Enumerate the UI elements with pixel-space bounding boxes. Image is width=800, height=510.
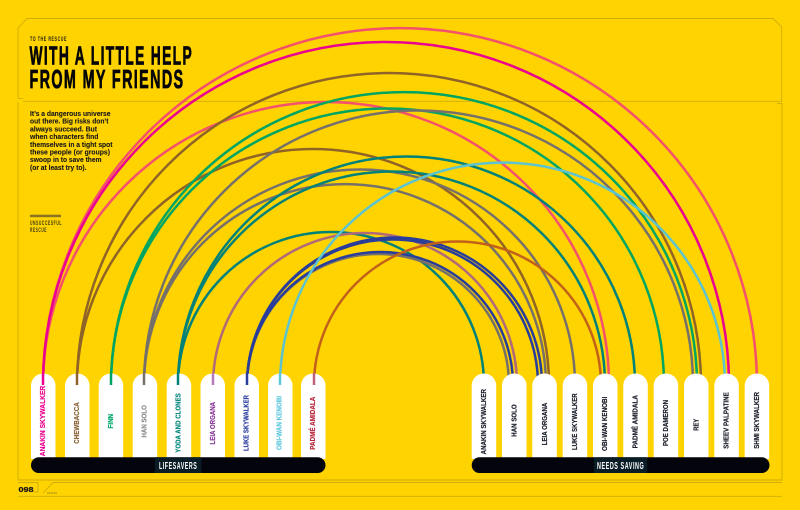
pill: Obi-Wan Kenobi: OBI-WAN KENOBI — [602, 397, 609, 451]
pill: Anakin Skywalker — [31, 373, 56, 459]
pill: Padme Amidala: PADMÉ AMIDALA — [630, 395, 640, 448]
legend: unsuccessful rescue — [30, 215, 62, 234]
page number: 098 — [18, 487, 34, 494]
pill: Rey: REY — [694, 418, 700, 431]
legend: unsuccessful rescue: UNSUCCESFUL — [30, 221, 62, 227]
heading: FROM MY FRIENDS — [30, 64, 184, 94]
pill: Luke Skywalker: LUKE SKYWALKER — [244, 395, 250, 451]
lifesavers column — [31, 373, 326, 459]
arc: Anakin to Obi-Wan — [43, 102, 609, 385]
pill: Leia Organa: LEIA ORGANA — [210, 402, 217, 444]
arc diagram — [43, 28, 757, 385]
pill: Obi-Wan Kenobi — [593, 373, 618, 459]
pill: Obi-Wan Kenobi — [268, 373, 292, 459]
pill: Anakin Skywalker: ANAKIN SKYWALKER — [40, 386, 47, 456]
pill: Sheev Palpatine: SHEEV PALPATINE — [724, 392, 730, 449]
arc: Anakin to Shmi — [43, 28, 757, 385]
pill: Anakin Skywalker — [472, 373, 496, 459]
bar: lifesavers — [31, 457, 326, 473]
arc: Luke to Han grey — [247, 254, 509, 385]
arc: Leia to Han — [213, 233, 517, 385]
pill: Anakin Skywalker: ANAKIN SKYWALKER — [481, 389, 488, 454]
heading: WITH A LITTLE HELP — [30, 40, 193, 70]
title block — [30, 36, 193, 94]
arc: Finn to Poe — [111, 109, 664, 385]
pill: Poe Dameron: POE DAMERON — [663, 400, 670, 446]
arc: Luke to Leia outer — [247, 237, 542, 385]
folio mark: 000 — [47, 491, 58, 495]
arc: Chewbacca to Rey — [77, 73, 701, 385]
pill: Han Solo: HAN SOLO — [512, 404, 518, 437]
bar: lifesavers: LIFESAVERS — [159, 461, 197, 472]
arc: Luke to Han — [247, 252, 513, 385]
intro text: always succeed. But — [30, 124, 97, 133]
intro text: out there. Big risks don’t — [30, 117, 109, 126]
arc: Anakin to Sheev — [43, 42, 729, 385]
pill: Padme Amidala — [301, 373, 326, 459]
arc: Luke to Leia inner — [247, 240, 538, 385]
intro text: (or at least try to). — [30, 163, 86, 172]
arc: Yoda to Padme — [178, 157, 635, 385]
pill: Han Solo: HAN SOLO — [142, 405, 148, 438]
pill: Luke Skywalker — [563, 373, 587, 459]
pill: Padme Amidala: PADMÉ AMIDALA — [308, 397, 317, 450]
arc: Han to Rey — [144, 110, 693, 385]
intro text: these people (or groups) — [30, 148, 110, 156]
pill: Leia Organa: LEIA ORGANA — [542, 403, 549, 445]
pill: Chewbacca — [65, 373, 90, 459]
pill: Sheev Palpatine — [714, 373, 739, 459]
pill: Finn — [99, 373, 123, 459]
pill: Luke Skywalker: LUKE SKYWALKER — [572, 393, 579, 450]
pill: Leia Organa — [532, 373, 557, 459]
pill: Shmi Skywalker — [745, 373, 769, 459]
arc: Yoda to Obi-Wan — [178, 171, 605, 385]
legend: unsuccessful rescue: RESCUE — [30, 228, 47, 234]
pill: Han Solo — [502, 373, 526, 459]
arc: Chewbacca to Leia — [77, 149, 549, 385]
pill: Luke Skywalker — [234, 373, 259, 459]
pill: Chewbacca: CHEWBACCA — [74, 402, 81, 444]
intro text: themselves in a tight spot — [30, 140, 113, 149]
pill: Obi-Wan Kenobi: OBI-WAN KENOBI — [276, 396, 284, 450]
intro text: swoop in to save them — [30, 155, 102, 164]
pill: Han Solo — [133, 373, 157, 459]
pill: Rey — [684, 373, 708, 459]
pill: Leia Organa — [200, 373, 225, 459]
intro text: It’s a dangerous universe — [30, 109, 111, 118]
intro text — [29, 109, 113, 172]
arc: Padme to Obi-Wan — [314, 242, 601, 385]
intro text: when characters find — [29, 132, 99, 141]
arc: Finn to Rey — [111, 92, 697, 385]
bar: needs saving: NEEDS SAVING — [597, 461, 644, 472]
pill: Finn: FINN — [108, 414, 115, 428]
bar: needs saving — [472, 457, 770, 473]
pill: Yoda and Clones — [167, 373, 191, 459]
pill: Yoda and Clones: YODA AND CLONES — [176, 393, 182, 453]
arc: Han to Leia — [144, 184, 546, 385]
arc: Obi-Wan to Sheev — [280, 163, 725, 385]
needs saving column — [472, 373, 769, 459]
kicker: TO THE RESCUE — [30, 36, 67, 43]
pill: Poe Dameron — [654, 373, 678, 459]
pill: Padme Amidala — [623, 373, 648, 459]
pill: Shmi Skywalker: SHMI SKYWALKER — [754, 392, 761, 449]
heading — [30, 40, 193, 94]
arc: Yoda to Anakin — [178, 232, 484, 385]
arc: Han to Luke — [144, 170, 575, 385]
